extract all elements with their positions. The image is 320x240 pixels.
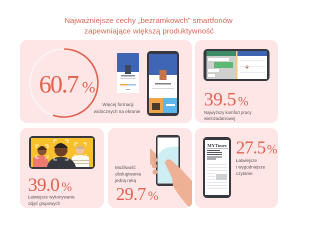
caption: Łatwiejsze wykonywanie	[28, 194, 75, 200]
caption: Najwyższy komfort pracy	[204, 110, 252, 115]
caption: zdjęć grupowych	[28, 201, 61, 206]
caption: jedną ręką	[114, 178, 137, 183]
caption: Możliwość	[115, 165, 137, 170]
caption	[114, 165, 142, 183]
caption: i wygodniejsze	[236, 164, 266, 170]
hand holding phone illustration	[150, 135, 192, 207]
ring chart	[30, 49, 98, 117]
title	[64, 16, 233, 36]
panel: 39.5 percent multitasking	[195, 40, 278, 123]
caption	[94, 102, 141, 114]
caption: czytanie	[236, 171, 253, 176]
value: 29.7 percent: %	[148, 189, 158, 203]
value: 60.7 percent: 60.7	[39, 72, 79, 98]
value: 60.7 percent: %	[82, 80, 95, 96]
value: 39.5 percent: 39.5	[204, 90, 236, 110]
caption	[236, 158, 266, 176]
caption	[28, 194, 75, 206]
value: 39.5 percent: %	[238, 94, 248, 108]
panel: 29.7 percent one-handed use	[108, 128, 192, 208]
caption: widocznych na ekranie	[94, 109, 141, 114]
value: 39.0 percent: 39.0	[28, 175, 59, 196]
panel: 27.5 percent easier reading	[195, 128, 278, 208]
caption: Łatwiejsze	[236, 158, 258, 163]
caption: Więcej formacji	[102, 102, 134, 107]
panel: 39.0 percent group photos	[20, 128, 104, 208]
large phone illustration	[147, 51, 179, 116]
panel: 60.7 percent more information on screen	[20, 40, 192, 123]
value: 39.0 percent: %	[62, 180, 72, 194]
value: 27.5 percent: %	[267, 142, 277, 156]
landscape phone illustration	[204, 49, 270, 81]
value: 60.7 percent	[39, 72, 95, 98]
value: 29.7 percent: 29.7	[116, 184, 146, 204]
title: zapewniające większą produktywność	[84, 26, 214, 36]
group photo phone illustration	[29, 136, 95, 169]
caption: wielozadaniowej	[204, 116, 235, 121]
title: Najważniejsze cechy „bezramkowch" smartfonów	[64, 16, 233, 25]
small phone illustration	[117, 53, 139, 93]
phone with news article illustration: MYTimes	[207, 143, 227, 148]
caption: obsługiwania	[115, 172, 142, 176]
caption	[204, 110, 252, 121]
value: 27.5 percent: 27.5	[236, 138, 266, 158]
